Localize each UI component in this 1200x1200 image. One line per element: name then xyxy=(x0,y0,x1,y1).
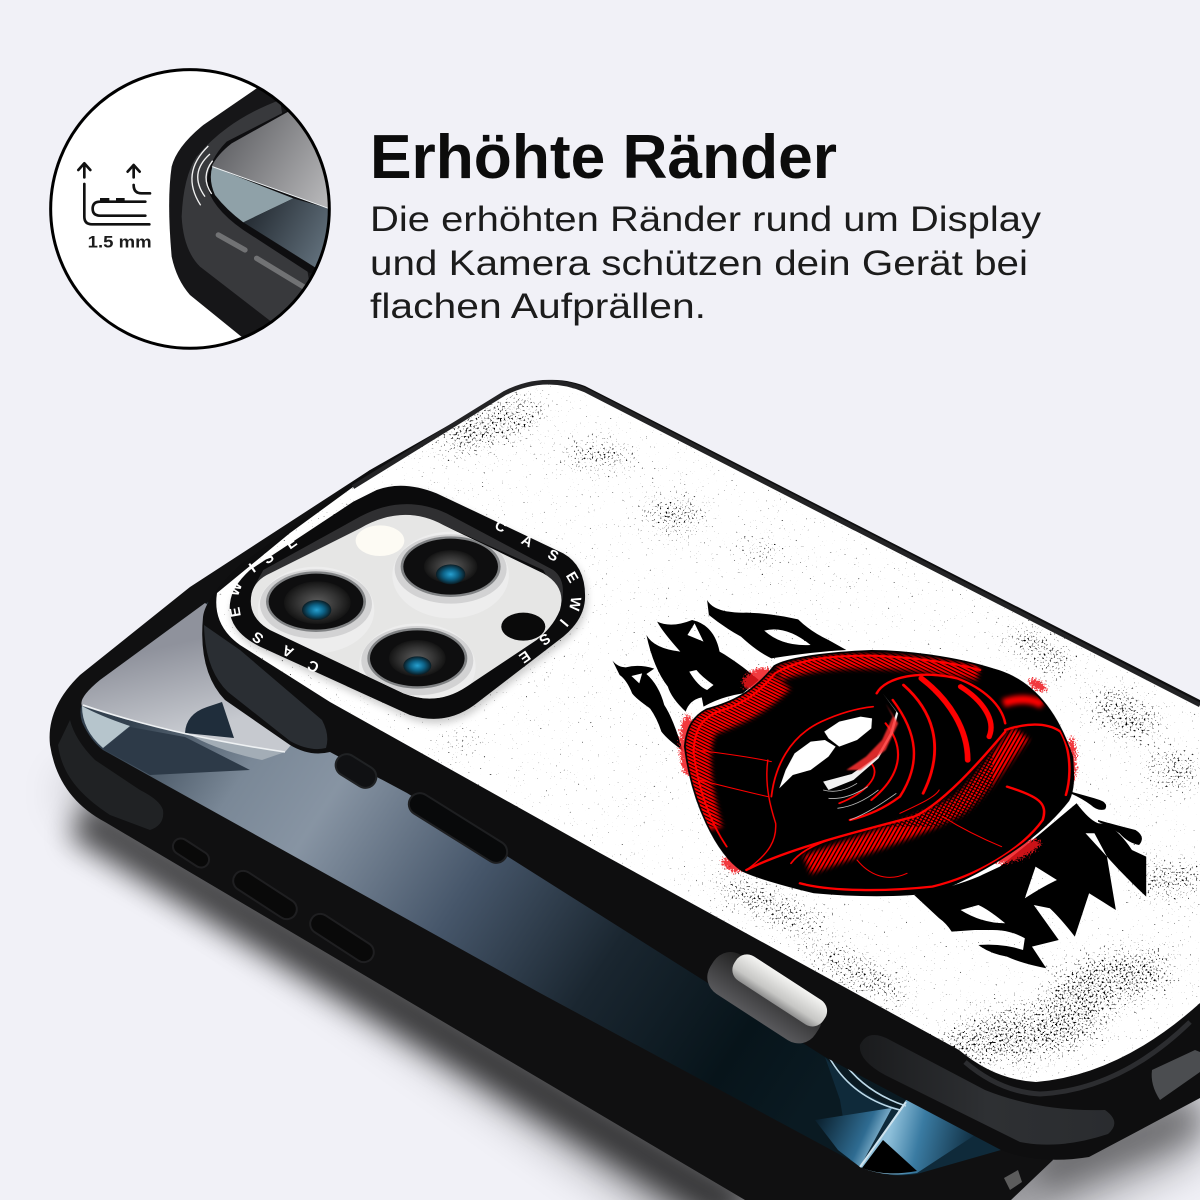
drips xyxy=(1071,792,1142,845)
ring lettering CASEWISE: E xyxy=(227,606,245,618)
ring lettering CASEWISE: E xyxy=(562,569,581,586)
ring lettering CASEWISE: A xyxy=(518,532,536,552)
grunge speckle texture xyxy=(426,384,1200,1078)
side button xyxy=(405,789,511,867)
inset phone corner xyxy=(169,88,312,337)
flash xyxy=(356,525,404,556)
charging port xyxy=(700,944,832,1051)
lens upper right xyxy=(395,534,507,604)
speaker grill corner xyxy=(1152,1050,1200,1100)
ring lettering CASEWISE: S xyxy=(545,547,561,566)
outline red strokes xyxy=(694,656,1069,890)
ring lettering CASEWISE xyxy=(226,518,583,675)
side port xyxy=(332,750,380,792)
screen wallpaper highlight xyxy=(815,1057,1001,1175)
ring lettering CASEWISE: E xyxy=(515,647,533,666)
red lips illustration xyxy=(671,640,1078,895)
ring lettering CASEWISE: E xyxy=(283,534,300,553)
lens upper left xyxy=(260,569,372,639)
inset screen grey xyxy=(212,112,340,208)
lens raised discs xyxy=(260,622,320,654)
ring lettering CASEWISE: I xyxy=(556,616,571,629)
drop shadow under phones xyxy=(60,760,1200,1200)
ring lettering CASEWISE: I xyxy=(246,561,259,576)
inset bumper grey band xyxy=(182,100,310,323)
camera black ring xyxy=(230,486,585,719)
body text: flachen Aufprällen. xyxy=(370,287,706,326)
inset impact arcs xyxy=(192,146,213,205)
body text: und Kamera schützen dein Gerät bei xyxy=(370,244,1028,283)
ring inner bevel xyxy=(255,504,563,603)
thickness label: 1.5 mm xyxy=(88,233,152,252)
front phone metal corner xyxy=(1004,1170,1022,1190)
ring lettering CASEWISE: W xyxy=(226,580,246,599)
body text xyxy=(370,200,1042,326)
inset sheen xyxy=(218,235,303,287)
inset circle: raised edge detail xyxy=(51,60,340,360)
ring lettering CASEWISE: W xyxy=(565,595,583,612)
print rim line xyxy=(353,382,1200,705)
back phone side band xyxy=(202,380,1200,1160)
upper flame shapes xyxy=(612,661,683,751)
red paint splash xyxy=(680,663,1076,876)
left bumper patch xyxy=(204,625,327,749)
edge highlight xyxy=(965,1022,1190,1094)
microphone hole xyxy=(501,613,545,641)
teeth xyxy=(779,740,836,788)
body text: Die erhöhten Ränder rund um Display xyxy=(370,200,1042,239)
bottom bumper patch xyxy=(860,1035,1114,1145)
inset screen dark xyxy=(243,198,328,268)
front phone with black bumper and display xyxy=(50,470,1053,1200)
lens lower xyxy=(361,626,473,695)
front phone display xyxy=(80,500,1005,1174)
inset screen pale xyxy=(211,167,293,222)
front side buttons xyxy=(170,835,378,966)
tongue strokes xyxy=(877,675,1005,723)
inset white disc xyxy=(51,70,329,348)
ring lettering CASEWISE: A xyxy=(280,641,297,660)
inset glass line xyxy=(212,167,328,208)
camera glass plate xyxy=(251,515,561,699)
front bumper corner patch xyxy=(58,720,163,830)
icon: raised edge profile xyxy=(78,163,150,224)
printed white surface xyxy=(216,382,1200,1082)
lips black base xyxy=(686,652,1072,895)
ring lettering CASEWISE: S xyxy=(250,627,267,646)
lower flame shapes xyxy=(914,803,1146,968)
ring lettering CASEWISE: S xyxy=(535,629,553,648)
camera surround xyxy=(226,486,587,724)
inset inner black rim xyxy=(207,113,310,273)
front phone frame xyxy=(50,470,1053,1200)
tongue highlight xyxy=(823,693,898,790)
inset circle outline xyxy=(51,70,329,348)
camera bump soft shadow xyxy=(232,490,587,724)
ring lettering CASEWISE: S xyxy=(260,549,277,568)
ring lettering CASEWISE: C xyxy=(305,656,322,675)
back phone with white printed case xyxy=(202,380,1200,1160)
heading: Erhöhte Ränder xyxy=(370,123,837,192)
hatched red shading xyxy=(671,640,1078,890)
ring lettering CASEWISE: C xyxy=(492,518,509,537)
flame lettering artwork xyxy=(612,600,1146,968)
